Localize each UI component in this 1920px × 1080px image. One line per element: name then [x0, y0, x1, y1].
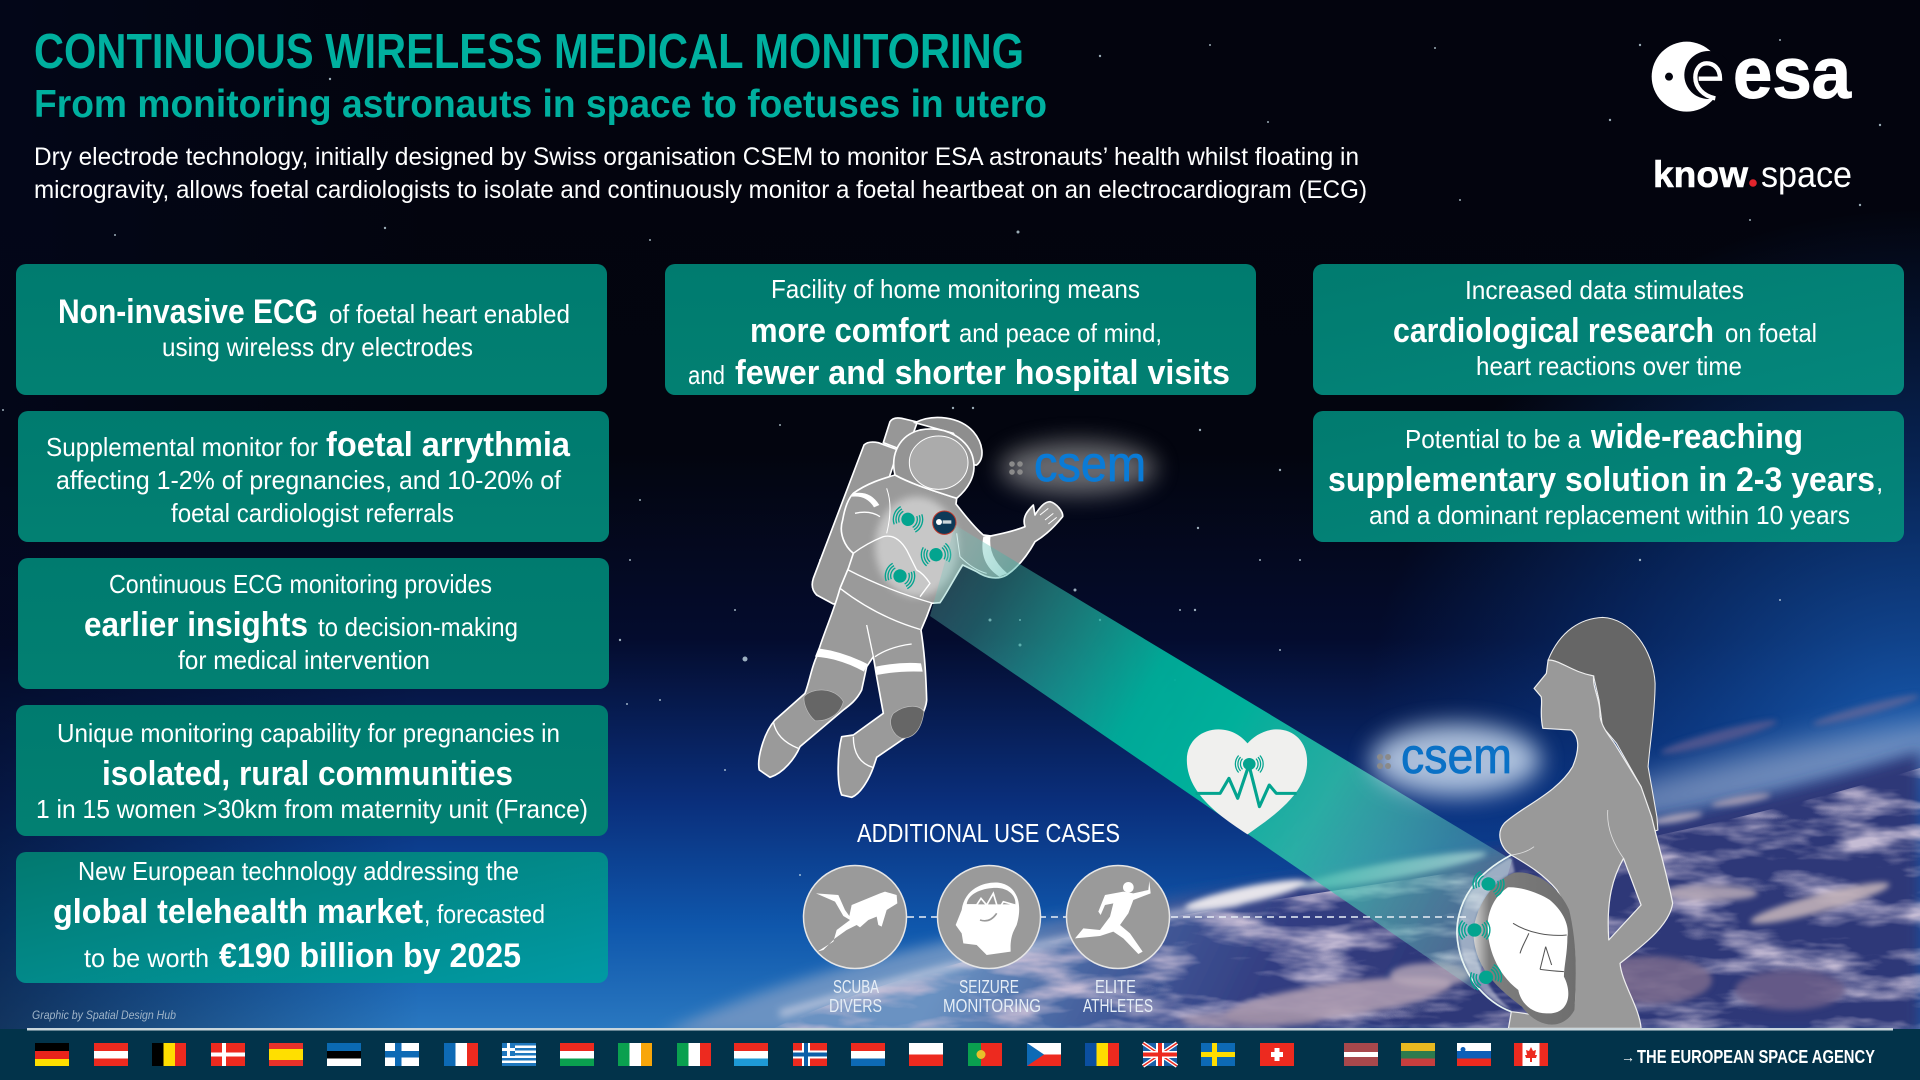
panel: non-invasive ECG: [16, 264, 607, 395]
flag: Slovenia: [1457, 1043, 1491, 1066]
icon: runner: [1075, 881, 1151, 954]
astronaut backpack: [812, 418, 917, 604]
panel: non-invasive ECG: Non-invasive ECG: [58, 293, 318, 331]
panel: cardiological research: heart reactions over time: [1476, 351, 1742, 381]
astronaut hand lines: [1040, 508, 1057, 524]
astronaut knee patches: [804, 690, 924, 738]
panel: wide-reaching solution: ,: [1876, 467, 1883, 497]
icon: heart with ECG: [1187, 729, 1307, 834]
panel: cardiological research: Increased data stimulates: [1465, 275, 1744, 305]
logo: csem (woman): csem: [1401, 728, 1512, 784]
panel: rural communities: isolated, rural communities: [102, 755, 513, 793]
footer bar: [0, 1028, 1920, 1080]
sensor: [883, 562, 917, 590]
panel: non-invasive ECG: of foetal heart enabled: [329, 299, 570, 329]
panel: home monitoring: Facility of home monitoring means: [771, 274, 1140, 304]
flag: Norway: [793, 1043, 827, 1066]
panel: cardiological research: [1313, 264, 1904, 395]
logo: csem (astronaut): csem: [1034, 436, 1146, 492]
flag: Netherlands: [851, 1043, 885, 1066]
astronaut chest glow: [875, 497, 958, 597]
panel: home monitoring: [665, 264, 1256, 395]
panel: foetal arrythmia: Supplemental monitor for: [46, 432, 318, 462]
panel: wide-reaching solution: supplementary solution in 2-3 years: [1328, 461, 1875, 499]
icon: diver: [816, 892, 897, 952]
footer: agency name: THE EUROPEAN SPACE AGENCY: [1637, 1047, 1875, 1067]
subtitle: From monitoring astronauts in space to foetuses in utero: [34, 83, 1047, 126]
flag: United Kingdom: [1143, 1043, 1177, 1066]
panel: home monitoring: and peace of mind,: [959, 318, 1162, 348]
flag: Ireland: [618, 1043, 652, 1066]
flag: Spain: [269, 1043, 303, 1066]
stars: [2, 34, 1881, 876]
belly sensor: [1468, 963, 1504, 991]
flag: Hungary: [560, 1043, 594, 1066]
panel: earlier insights: for medical intervention: [178, 645, 430, 675]
flag: Denmark: [211, 1043, 245, 1066]
use case: scuba divers: SCUBA: [833, 977, 879, 997]
flag: Italy: [677, 1043, 711, 1066]
hair: [1548, 617, 1658, 832]
panel: telehealth market: [16, 852, 608, 983]
logo: know.space: space: [1761, 154, 1852, 195]
panel: telehealth market: €190 billion by 2025: [219, 937, 521, 975]
illustration: astronaut: [759, 417, 1063, 797]
panel: foetal arrythmia: [18, 411, 609, 542]
belly sensor: [1459, 921, 1490, 939]
panel: cardiological research: on foetal: [1725, 318, 1817, 348]
use case: elite athletes: ATHLETES: [1083, 996, 1153, 1016]
flag: France: [444, 1043, 478, 1066]
panel: rural communities: [16, 705, 608, 836]
flag: Germany: [35, 1043, 69, 1066]
flag: Greece: [502, 1043, 536, 1066]
panel: telehealth market: , forecasted: [424, 899, 545, 929]
panel: home monitoring: fewer and shorter hospital visits: [735, 354, 1230, 392]
panel: earlier insights: [18, 558, 609, 689]
use case: elite athletes: ELITE: [1095, 977, 1136, 997]
icon: head with brain: [956, 883, 1019, 955]
logo: esa: [1652, 34, 1852, 114]
sensor: [920, 543, 952, 567]
panel: earlier insights: earlier insights: [84, 606, 308, 644]
credit: Graphic by Spatial Design Hub: [32, 1008, 176, 1022]
flag: Belgium: [152, 1043, 186, 1066]
member state flags: [35, 1043, 1548, 1066]
use case: scuba divers: [804, 866, 906, 1016]
breast line: [1511, 810, 1624, 858]
panel: telehealth market: New European technology addressing the: [78, 856, 519, 886]
panel: telehealth market: global telehealth market: [53, 893, 423, 931]
title: CONTINUOUS WIRELESS MEDICAL MONITORING: [34, 25, 1024, 79]
mission patch: [933, 511, 956, 534]
flag: Czech Republic: [1027, 1043, 1061, 1066]
flag: Romania: [1085, 1043, 1119, 1066]
logo: esa: esa: [1733, 34, 1852, 114]
sensor: [891, 505, 925, 533]
uterus: [1473, 872, 1576, 1025]
flag: Finland: [385, 1043, 419, 1066]
panel: foetal arrythmia: foetal arrythmia: [326, 426, 571, 464]
flag: Estonia: [327, 1043, 361, 1066]
panel: earlier insights: to decision-making: [318, 612, 518, 642]
foetus: [1488, 887, 1568, 1013]
panel: home monitoring: and: [688, 360, 725, 390]
heading: additional use cases: ADDITIONAL USE CASES: [857, 818, 1120, 848]
panel: cardiological research: cardiological research: [1393, 312, 1714, 350]
panel: telehealth market: to be worth: [84, 943, 209, 973]
use case: elite athletes: [1066, 866, 1170, 1016]
illustration: pregnant woman: [1457, 617, 1673, 1028]
panel: rural communities: Unique monitoring capability for pregnancies in: [57, 718, 560, 748]
flag: Canada: [1514, 1043, 1548, 1066]
logo: csem (woman): [1371, 724, 1541, 796]
flag: Austria: [94, 1043, 128, 1066]
logo: know.space: [1653, 154, 1852, 195]
intro text: Dry electrode technology, initially designed by Swiss organisation CSEM to monitor ESA astronauts’ health whilst floating in: [34, 143, 1359, 171]
astronaut helmet: [894, 417, 982, 498]
panel: home monitoring: more comfort: [750, 312, 950, 350]
astronaut suit lines: [773, 488, 987, 768]
flag: Switzerland: [1260, 1043, 1294, 1066]
panel: wide-reaching solution: wide-reaching: [1590, 418, 1803, 456]
earth: cloud patches: [1180, 691, 1920, 1033]
flag: Latvia: [1344, 1043, 1378, 1066]
panel: foetal arrythmia: foetal cardiologist referrals: [171, 498, 454, 528]
panel: wide-reaching solution: Potential to be a: [1405, 424, 1582, 454]
panel: wide-reaching solution: and a dominant replacement within 10 years: [1369, 500, 1850, 530]
use case: seizure monitoring: [938, 866, 1041, 1016]
panel: non-invasive ECG: using wireless dry electrodes: [162, 332, 473, 362]
panel: rural communities: 1 in 15 women >30km from maternity unit (France): [36, 794, 588, 824]
body silhouette: [1500, 660, 1673, 1028]
belly sensor: [1471, 870, 1506, 898]
use case: seizure monitoring: MONITORING: [943, 996, 1041, 1016]
footer: agency name: →: [1621, 1049, 1635, 1065]
use case: seizure monitoring: SEIZURE: [959, 977, 1019, 997]
use case: scuba divers: DIVERS: [829, 996, 882, 1016]
belly glow: [1459, 857, 1515, 1010]
panel: earlier insights: Continuous ECG monitoring provides: [109, 569, 492, 599]
flag: Lithuania: [1401, 1043, 1435, 1066]
panel: foetal arrythmia: affecting 1-2% of pregnancies, and 10-20% of: [56, 465, 562, 495]
astronaut suit: [759, 475, 1063, 797]
flag: Poland: [909, 1043, 943, 1066]
flag: Sweden: [1201, 1043, 1235, 1066]
use cases connector line: [907, 916, 1470, 918]
intro text: microgravity, allows foetal cardiologists to isolate and continuously monitor a foetal heartbeat on an electrocardiogram (ECG): [34, 176, 1367, 204]
belly outline: [1457, 855, 1511, 1012]
logo: know.space: know: [1653, 154, 1748, 195]
astronaut suit stripes: [815, 493, 1007, 675]
intro text: [34, 143, 1367, 204]
panel: wide-reaching solution: [1313, 411, 1904, 542]
flag: Portugal: [968, 1043, 1002, 1066]
light beam: [930, 525, 1512, 990]
flag: Luxembourg: [734, 1043, 768, 1066]
